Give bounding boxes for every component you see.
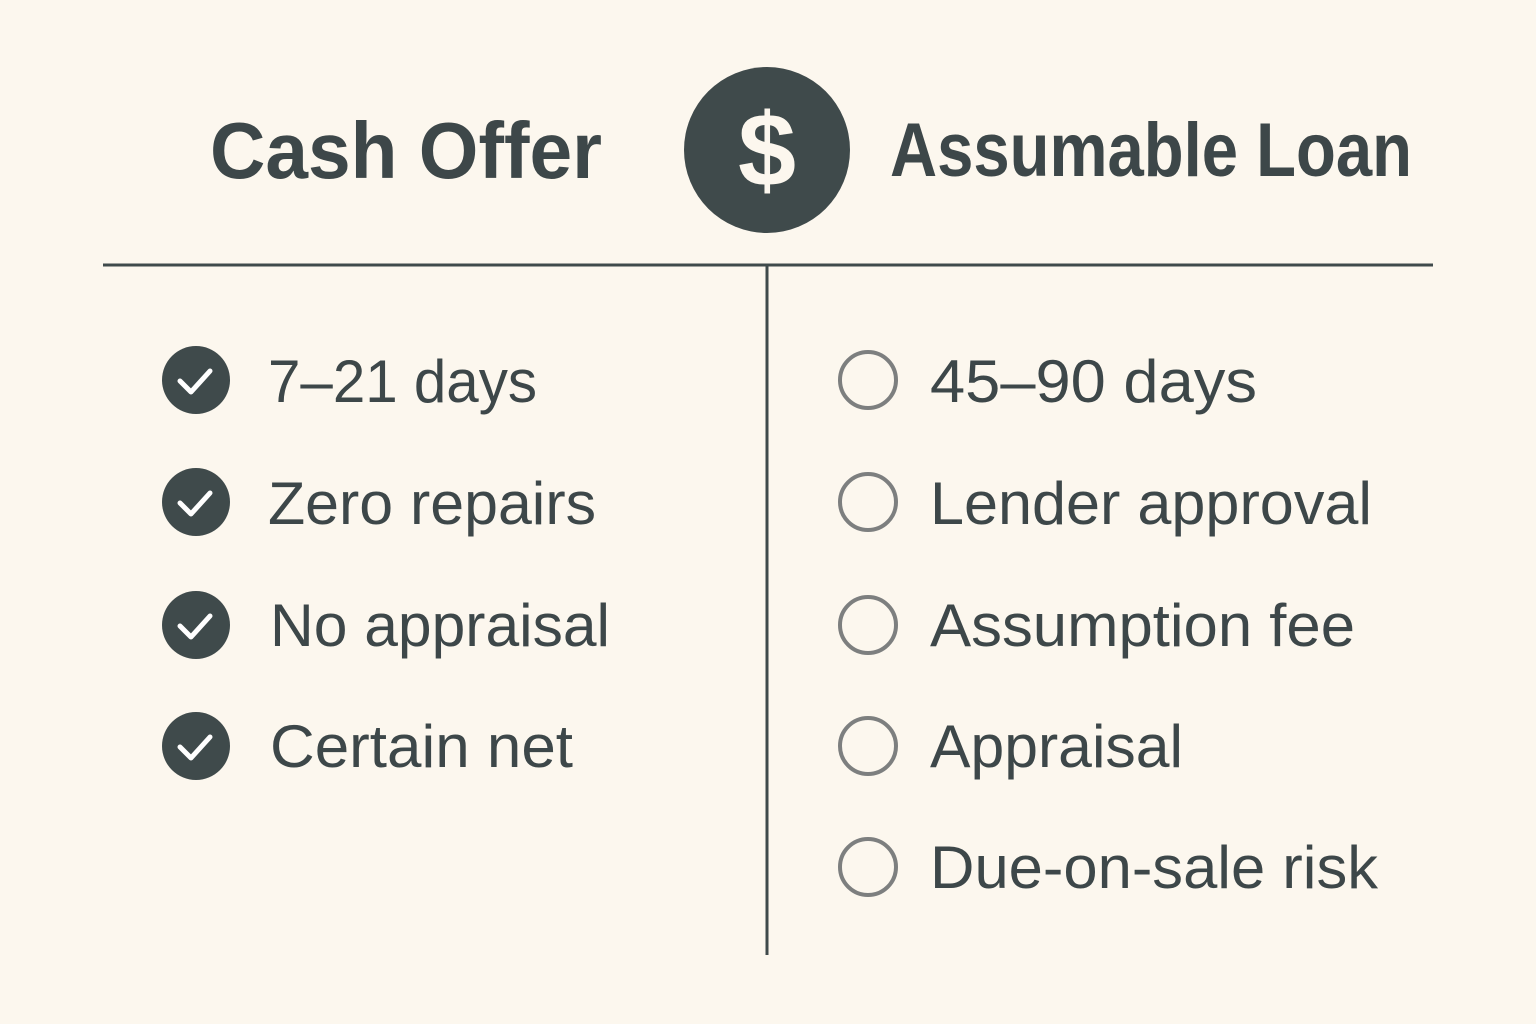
item: 7–21 days [162, 346, 537, 415]
list: assumable loan requirements [840, 348, 1379, 901]
item: 45–90 days: 45–90 days [930, 348, 1257, 415]
item: Lender approval: Lender approval [930, 470, 1372, 537]
item: Certain net: Certain net [270, 713, 573, 780]
item: Due-on-sale risk: Due-on-sale risk [930, 834, 1379, 901]
list: cash offer benefits [162, 346, 610, 780]
item: Assumption fee: Assumption fee [930, 592, 1355, 659]
item: 7–21 days: 7–21 days [268, 348, 537, 415]
item: No appraisal: No appraisal [270, 592, 610, 659]
icon: dollar circle [684, 67, 850, 233]
item: Zero repairs: Zero repairs [268, 470, 596, 537]
title: Assumable Loan: Assumable Loan [890, 108, 1412, 193]
title: Cash Offer: Cash Offer [210, 106, 602, 195]
item: Appraisal: Appraisal [930, 713, 1183, 780]
icon: dollar circle: $ [738, 93, 796, 209]
